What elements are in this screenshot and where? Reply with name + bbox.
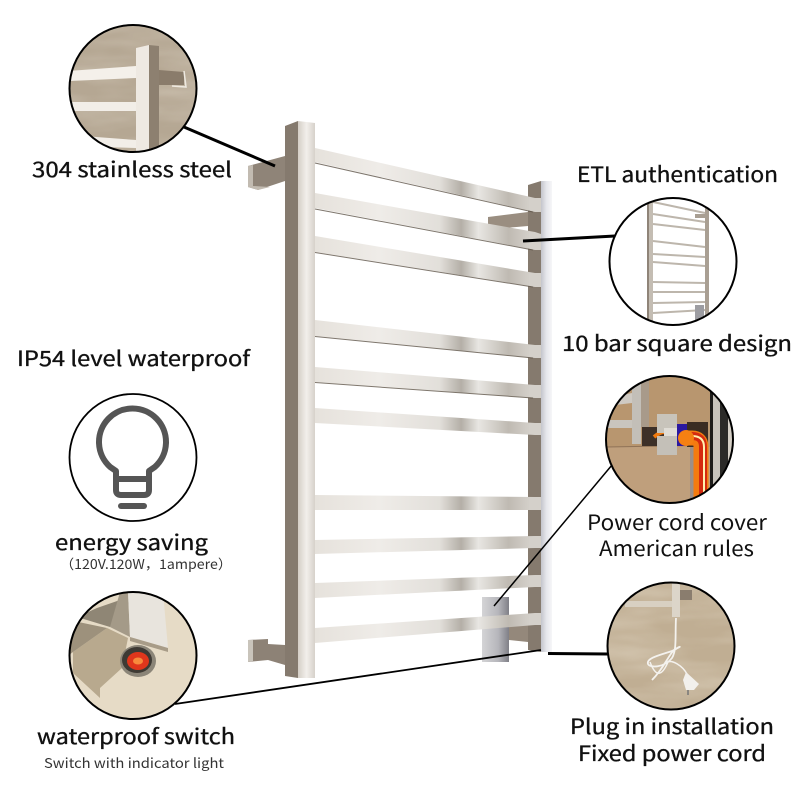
leader line: plug in installation — [548, 652, 608, 656]
left upright post — [285, 121, 315, 678]
circle: full rack view — [609, 198, 737, 326]
leader line: waterproof switch — [175, 650, 541, 704]
ten rails — [315, 148, 541, 643]
leader line: bar design — [523, 236, 615, 241]
leader line: stainless steel — [184, 127, 275, 166]
top right wall bracket — [488, 212, 528, 229]
rail shadow edges — [315, 163, 533, 398]
circle: power cord cover — [606, 376, 734, 504]
leader line: power cord cover — [494, 465, 612, 606]
bottom right bracket — [500, 625, 528, 642]
label: switch with indicator light: Switch with indicator light — [44, 752, 224, 772]
label: IP54 level waterproof: IP54 level waterproof — [17, 343, 251, 373]
label: voltage specification: （120V.120W，1ampere） — [60, 553, 232, 573]
circle: waterproof switch — [69, 592, 197, 720]
label: Power cord cover American rules: Power cord cover — [587, 507, 768, 537]
label: waterproof switch: waterproof switch — [37, 721, 235, 751]
label: Plug in installation Fixed power cord: Plug in installation — [570, 711, 774, 741]
icon: light bulb in circle — [70, 394, 196, 521]
circle: plug and power cord — [608, 582, 736, 710]
top left wall bracket — [248, 156, 285, 190]
label: Power cord cover American rules: American rules — [599, 533, 754, 563]
circle: stainless steel detail — [69, 25, 197, 153]
label: ETL authentication: ETL authentication — [577, 159, 778, 189]
label: 304 stainless steel: 304 stainless steel — [32, 154, 232, 184]
wall plate — [482, 597, 509, 662]
label: Power cord cover American rules — [587, 507, 768, 563]
bottom left wall bracket — [248, 639, 285, 665]
towel rack product — [248, 121, 552, 678]
label: Plug in installation Fixed power cord — [570, 711, 774, 768]
label: energy saving: energy saving — [55, 527, 208, 557]
label: 10 bar square design: 10 bar square design — [562, 328, 792, 358]
right upright post — [528, 181, 552, 652]
label: Plug in installation Fixed power cord: Fixed power cord — [578, 738, 766, 768]
